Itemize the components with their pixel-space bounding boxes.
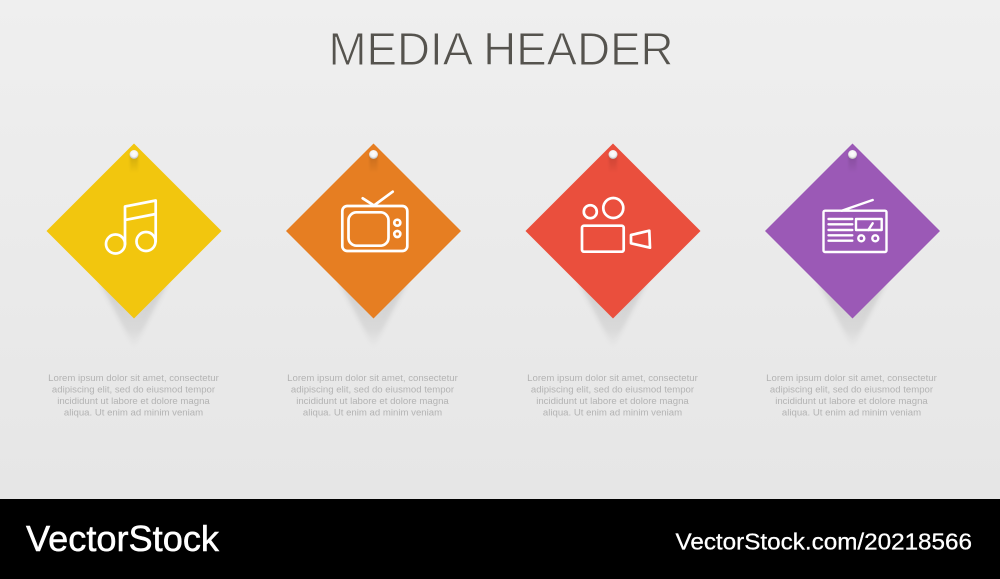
text: radio description — [766, 373, 938, 418]
text: video camera description: aliqua. Ut enim ad minim veniam — [543, 408, 682, 418]
panel: music — [46, 144, 222, 418]
footer bar — [0, 499, 1000, 579]
icon: television — [342, 192, 407, 251]
text: radio description: aliqua. Ut enim ad minim veniam — [782, 408, 921, 418]
text: music description: aliqua. Ut enim ad minim veniam — [64, 408, 203, 418]
diamond: music — [46, 144, 222, 318]
pin: music — [130, 150, 138, 173]
footer url: VectorStock.com/20218566 — [676, 528, 972, 554]
icon: music note — [106, 200, 156, 254]
diamond: video camera — [526, 144, 700, 318]
text: television description: aliqua. Ut enim ad minim veniam — [303, 408, 442, 418]
diamond shadow: radio — [818, 282, 886, 348]
panel: television — [286, 144, 461, 418]
diamond shadow: video camera — [579, 282, 647, 348]
diamond shadow: music — [100, 282, 168, 348]
diamond: radio — [765, 144, 940, 318]
pin: video camera — [608, 150, 618, 173]
text: music description — [48, 373, 220, 418]
footer logo: VectorStock — [26, 518, 220, 559]
diamond: television — [286, 144, 461, 318]
icon: video camera — [582, 198, 650, 252]
text: television description: incididunt ut labore et dolore magna — [296, 396, 449, 407]
icon: radio — [824, 200, 886, 252]
text: video camera description: Lorem ipsum dolor sit amet, consectetur — [527, 373, 699, 384]
text: radio description: incididunt ut labore et dolore magna — [775, 396, 928, 407]
text: television description — [287, 373, 459, 418]
panel: radio — [765, 144, 940, 418]
text: music description: adipiscing elit, sed do eiusmod tempor — [52, 384, 216, 396]
pin: television — [369, 150, 378, 173]
text: music description: incididunt ut labore et dolore magna — [57, 396, 210, 407]
text: television description: Lorem ipsum dolor sit amet, consectetur — [287, 373, 459, 384]
text: television description: adipiscing elit, sed do eiusmod tempor — [291, 384, 455, 396]
panel: video camera — [526, 144, 700, 418]
text: music description: Lorem ipsum dolor sit amet, consectetur — [48, 373, 220, 384]
title: MEDIA HEADER — [328, 23, 674, 75]
text: video camera description: incididunt ut labore et dolore magna — [536, 396, 689, 407]
text: video camera description — [527, 373, 699, 418]
pin: radio — [848, 150, 857, 173]
text: radio description: adipiscing elit, sed do eiusmod tempor — [770, 384, 934, 396]
text: radio description: Lorem ipsum dolor sit amet, consectetur — [766, 373, 938, 384]
text: video camera description: adipiscing elit, sed do eiusmod tempor — [531, 384, 695, 396]
diamond shadow: television — [340, 282, 408, 348]
